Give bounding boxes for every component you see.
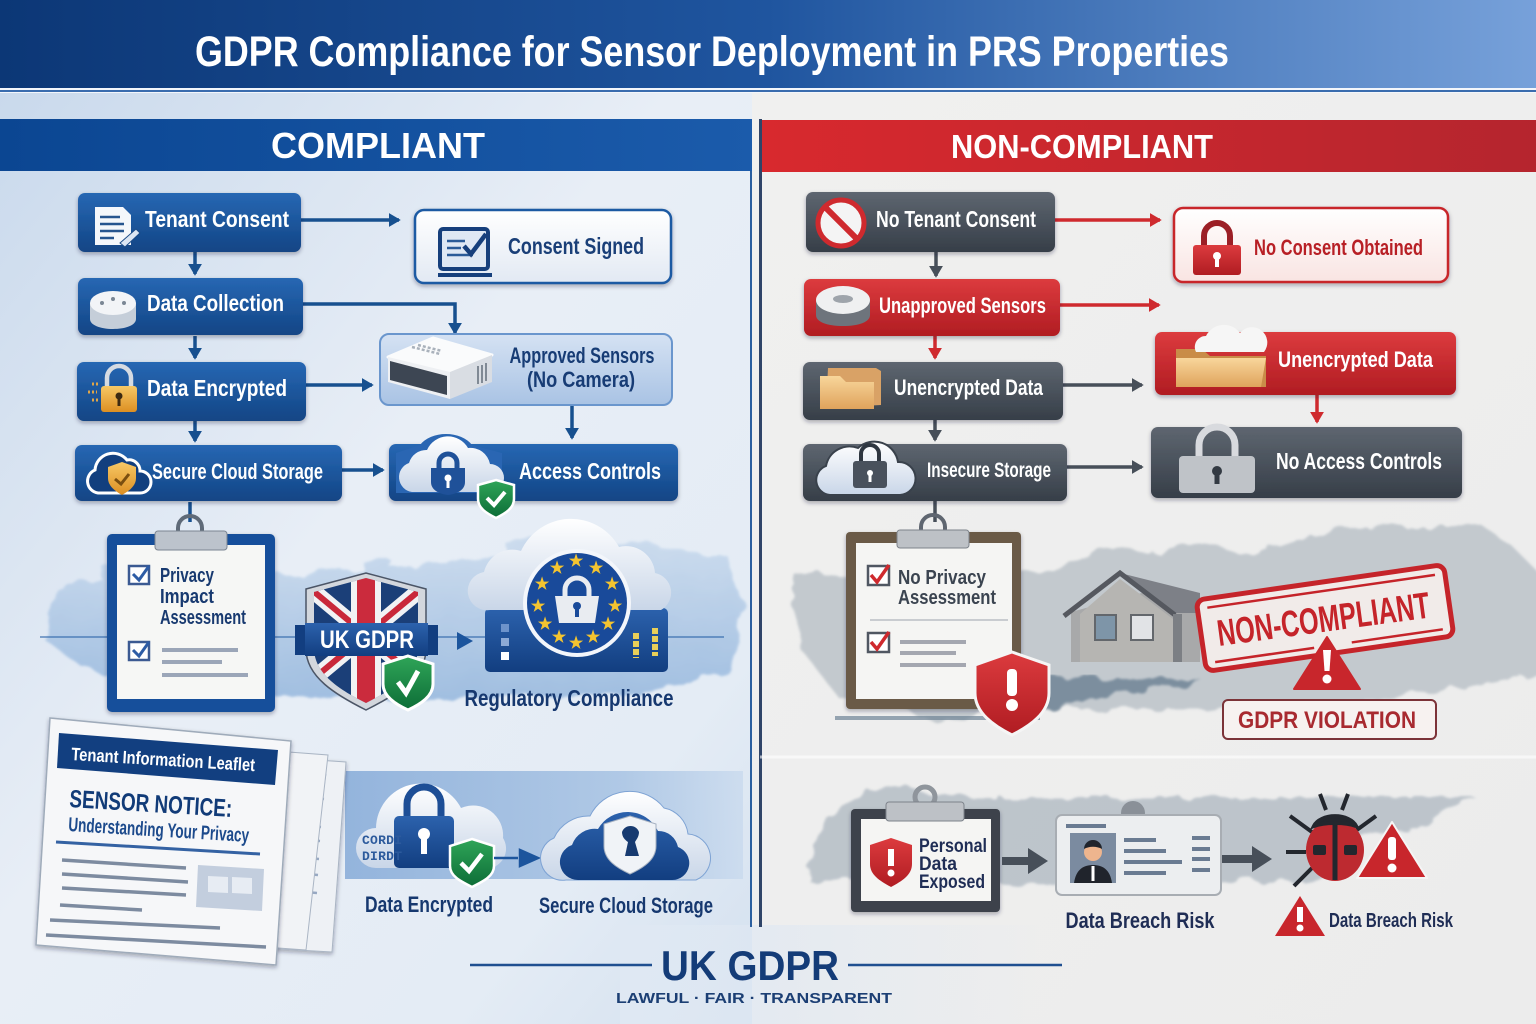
icon: EU cloud lock: ★ bbox=[589, 560, 604, 577]
clipboard: No Privacy Assessment: No Privacy bbox=[898, 567, 987, 589]
step: Consent Signed: Consent Signed bbox=[508, 233, 644, 259]
leaflet: Tenant Information Leaflet: SENSOR NOTICE: bbox=[69, 785, 233, 823]
icon: shield alert bbox=[870, 838, 912, 887]
decorative lower smoke bbox=[808, 788, 1475, 885]
icon: folder bbox=[820, 368, 881, 409]
step: Consent Signed bbox=[415, 210, 671, 283]
step: Tenant Consent: Tenant Consent bbox=[145, 206, 289, 232]
icon: EU cloud lock: ★ bbox=[538, 616, 553, 633]
step: Approved Sensors bbox=[380, 334, 672, 405]
step: Approved Sensors: (No Camera) bbox=[527, 367, 635, 392]
panel: compliant bbox=[0, 119, 752, 965]
clipboard: Privacy Impact Assessment: Privacy bbox=[160, 565, 215, 587]
icon: sensor puck bbox=[816, 286, 870, 326]
leaflet: Tenant Information Leaflet: Understanding Your Privacy bbox=[68, 814, 250, 847]
icon: clip bbox=[897, 515, 969, 548]
icon: cloud with lock bbox=[816, 442, 916, 495]
step: Unencrypted Data (right): Unencrypted Data bbox=[1278, 347, 1434, 372]
heading: non-compliant: NON-COMPLIANT bbox=[951, 128, 1213, 165]
leaflet: Tenant Information Leaflet: Tenant Information Leaflet bbox=[71, 744, 256, 775]
clipboard: No Privacy Assessment: Assessment bbox=[898, 587, 996, 609]
warning label: Data Breach Risk: Data Breach Risk bbox=[1329, 910, 1454, 932]
step: Approved Sensors: Approved Sensors bbox=[510, 343, 654, 368]
step: No Access Controls: No Access Controls bbox=[1276, 448, 1442, 474]
step: Data Encrypted: Data Encrypted bbox=[147, 375, 287, 401]
icon: EU cloud lock: ★ bbox=[608, 598, 623, 615]
arrow: to regulatory compliance bbox=[457, 632, 473, 650]
stamp: NON-COMPLIANT bbox=[1196, 565, 1454, 671]
step: No Tenant Consent: No Tenant Consent bbox=[876, 206, 1036, 232]
step: No Consent Obtained bbox=[1174, 208, 1448, 282]
icon: red padlock bbox=[1193, 223, 1241, 275]
icon: EU cloud lock: ★ bbox=[569, 553, 584, 570]
label: Data Encrypted: Data Encrypted bbox=[365, 892, 493, 917]
clipboard: No Privacy Assessment bbox=[846, 515, 1049, 735]
step: Data Collection bbox=[78, 278, 303, 335]
step: Tenant Consent bbox=[78, 193, 301, 252]
step: Data Encrypted bbox=[77, 362, 306, 421]
arrow: to malware bbox=[1222, 846, 1272, 872]
clipboard: Privacy Impact Assessment: Assessment bbox=[160, 607, 246, 629]
clipboard: Personal Data Exposed: Exposed bbox=[919, 872, 985, 893]
step: Unencrypted Data (left): Unencrypted Data bbox=[894, 375, 1044, 400]
clipboard: Privacy Impact Assessment: Impact bbox=[160, 586, 214, 608]
step: Data Collection: Data Collection bbox=[147, 290, 284, 316]
icon: ID card bbox=[1056, 801, 1221, 895]
step: Unencrypted Data (right) bbox=[1155, 325, 1456, 395]
step: Secure Cloud Storage: Secure Cloud Storage bbox=[152, 459, 323, 484]
icon: secure cloud shield bbox=[541, 791, 711, 880]
icon: clip bbox=[886, 787, 964, 821]
step: Insecure Storage: Insecure Storage bbox=[927, 459, 1051, 482]
icon: EU cloud lock: ★ bbox=[550, 560, 565, 577]
icon: EU cloud lock: ★ bbox=[552, 629, 567, 646]
icon: bug with warning bbox=[1286, 794, 1427, 886]
heading: compliant bbox=[0, 119, 752, 171]
icon: document with pen bbox=[95, 207, 140, 247]
icon: EU cloud lock: ★ bbox=[535, 576, 550, 593]
step: No Consent Obtained: No Consent Obtained bbox=[1254, 235, 1423, 260]
icon: cloud with lock and check bbox=[396, 434, 514, 518]
clipboard: Privacy Impact Assessment bbox=[107, 516, 275, 712]
label: Regulatory Compliance: Regulatory Compliance bbox=[464, 685, 674, 711]
icon: cloud with shield bbox=[88, 453, 151, 495]
panel: non-compliant bbox=[759, 119, 1536, 936]
warning label: Data Breach Risk bbox=[1275, 896, 1454, 936]
icon: house bbox=[1064, 573, 1200, 662]
step: No Tenant Consent bbox=[806, 192, 1055, 252]
decorative smoke wash bbox=[795, 524, 1536, 719]
icon: encrypted cloud bbox=[356, 784, 506, 887]
step: Insecure Storage bbox=[803, 442, 1067, 501]
icon: EU cloud lock: ★ bbox=[586, 629, 601, 646]
flow arrows: non-compliant bbox=[935, 220, 1317, 522]
icon: EU cloud lock bbox=[468, 519, 671, 672]
step: Secure Cloud Storage bbox=[75, 445, 342, 501]
tag: GDPR violation: GDPR VIOLATION bbox=[1238, 707, 1416, 734]
icon: clip bbox=[155, 516, 227, 550]
clipboard: Personal Data Exposed: Personal bbox=[919, 836, 987, 857]
step: Access Controls: Access Controls bbox=[519, 458, 661, 484]
badge: UK GDPR shield bbox=[295, 573, 438, 710]
step: Unapproved Sensors: Unapproved Sensors bbox=[879, 293, 1046, 318]
icon: folder with cloud bbox=[1176, 325, 1267, 387]
tag: GDPR violation bbox=[1223, 700, 1436, 739]
icon: encrypted cloud: DIRDT bbox=[362, 849, 402, 864]
step: Access Controls bbox=[389, 434, 678, 518]
icon: warning triangle bbox=[1294, 637, 1360, 689]
clipboard: Personal Data Exposed bbox=[851, 787, 1000, 912]
leaflet: Tenant Information Leaflet bbox=[36, 718, 346, 965]
arrow: to ID card bbox=[1002, 848, 1048, 874]
icon: EU cloud lock: ★ bbox=[605, 576, 620, 593]
flow arrows: compliant bbox=[190, 220, 572, 522]
icon: prohibited bbox=[818, 200, 864, 246]
icon: signed monitor bbox=[438, 229, 492, 275]
icon: padlock bbox=[88, 366, 137, 412]
icon: grey padlock bbox=[1179, 427, 1255, 493]
background: footer blend bbox=[620, 925, 1040, 1024]
icon: encrypted cloud: CORDI bbox=[362, 833, 402, 848]
stamp: NON-COMPLIANT: NON-COMPLIANT bbox=[1215, 585, 1432, 654]
label: Secure Cloud Storage: Secure Cloud Storage bbox=[539, 893, 713, 918]
heading: compliant: COMPLIANT bbox=[271, 125, 485, 166]
background: non-compliant side bbox=[752, 92, 1536, 1024]
arrow: to secure cloud bbox=[494, 850, 538, 866]
heading: non-compliant bbox=[762, 120, 1536, 172]
step: No Access Controls bbox=[1151, 427, 1462, 498]
footer: UK GDPR bbox=[470, 942, 1062, 1007]
icon: EU cloud lock: ★ bbox=[601, 616, 616, 633]
icon: sensor hub bbox=[388, 338, 492, 399]
icon: EU cloud lock: ★ bbox=[569, 635, 584, 652]
step: Unapproved Sensors bbox=[804, 279, 1060, 336]
icon: sensor puck bbox=[90, 291, 136, 329]
icon: EU cloud lock: ★ bbox=[531, 598, 546, 615]
title: GDPR Compliance for Sensor Deployment in PRS Properties bbox=[195, 28, 1229, 76]
clipboard: Personal Data Exposed: Data bbox=[919, 854, 957, 875]
badge: UK GDPR shield: UK GDPR bbox=[320, 626, 414, 654]
label: Data Breach Risk: Data Breach Risk bbox=[1066, 908, 1215, 933]
decorative lower wash bbox=[345, 771, 743, 879]
decorative skyline wash bbox=[45, 540, 743, 700]
icon: red shield alert bbox=[975, 652, 1049, 735]
background: compliant side bbox=[0, 92, 752, 1024]
footer: UK GDPR: UK GDPR bbox=[661, 942, 839, 989]
footer: UK GDPR: LAWFUL · FAIR · TRANSPARENT bbox=[616, 990, 892, 1007]
step: Unencrypted Data (left) bbox=[803, 362, 1063, 420]
header banner bbox=[0, 0, 1536, 93]
